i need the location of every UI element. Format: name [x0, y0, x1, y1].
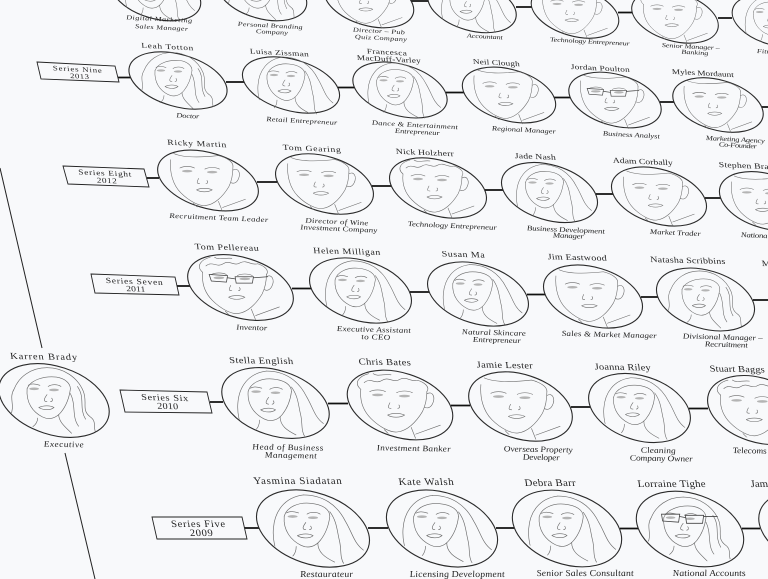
label: Series Five 2009: 2009 — [189, 528, 214, 539]
portrait: Kate Walsh: Kate Walsh — [398, 477, 455, 488]
portrait: Chris Bates: Chris Bates — [358, 357, 412, 368]
portrait: Jamie Lester: Jamie Lester — [476, 360, 534, 371]
portrait: Kate Walsh — [376, 476, 508, 579]
portrait: Natasha Scribbins — [649, 255, 764, 349]
label: Series Seven 2011: Series Seven — [105, 276, 164, 287]
connector line series nine — [118, 78, 768, 107]
portrait: Debra Barr: Debra Barr — [524, 478, 577, 489]
portrait: Jamie Lester: Developer — [521, 452, 561, 462]
portrait: Jamie Lester — [460, 360, 581, 462]
portrait: Francesca MacDuff-Varley: MacDuff-Varley — [357, 54, 422, 65]
portrait: Tom Gearing: Tom Gearing — [282, 143, 342, 154]
portrait: Tom Pellereau — [180, 242, 301, 332]
connector line series six — [210, 402, 708, 408]
portrait: Jade Nash: Jade Nash — [514, 151, 557, 162]
portrait: James McQueen — [749, 478, 768, 579]
portrait: Jordan Poulton — [562, 62, 668, 140]
portrait: Joanna Riley: Company Owner — [629, 453, 694, 463]
portrait: Yasmina Siadatan — [246, 476, 380, 579]
series six row — [0, 351, 768, 463]
portrait: Nick Holzherr: Technology Entrepreneur — [407, 220, 498, 232]
label: Series Nine 2013: 2013 — [70, 72, 89, 81]
label: Series Six 2010: 2010 — [157, 401, 179, 412]
label: Series Five 2009 — [152, 517, 247, 539]
portrait: Digital Marketing Sales Manager — [105, 0, 207, 33]
label: Series Eight 2012 — [63, 166, 149, 187]
portrait: Myles Mordaunt: Co-Founder — [718, 140, 757, 150]
portrait: Luisa Zissman: Retail Entrepreneur — [265, 115, 338, 127]
portrait: Jordan Poulton: Jordan Poulton — [571, 63, 631, 74]
portrait: Digital Marketing Sales Manager: Sales Manager — [135, 23, 189, 33]
portrait: Stuart Baggs — [699, 363, 768, 457]
portrait: Leah Totton: Doctor — [175, 111, 200, 120]
portrait: Myles Mordaunt: Myles Mordaunt — [672, 68, 735, 79]
portrait: Jim Eastwood: Jim Eastwood — [547, 252, 608, 263]
portrait: Jim Eastwood: Sales & Market Manager — [561, 329, 658, 340]
portrait: Helen Milligan — [302, 246, 419, 342]
portrait: Technology Entrepreneur: Technology Entrepreneur — [550, 36, 630, 47]
portrait: Karren Brady: Karren Brady — [10, 351, 78, 363]
label: Series Seven 2011: 2011 — [126, 284, 146, 294]
label: Series Nine 2013 — [37, 62, 119, 82]
portrait: Joanna Riley: Joanna Riley — [594, 362, 651, 373]
portrait: Tom Gearing: Director of Wine — [304, 216, 369, 227]
portrait: Senior Manager Banking — [626, 0, 724, 57]
portrait: Karren Brady — [0, 351, 119, 450]
series five row — [152, 476, 768, 579]
portrait: Senior Manager Banking: Banking — [681, 49, 709, 57]
portrait: Susan Ma: Susan Ma — [441, 249, 485, 259]
portrait: Ricky Martin: Recruitment Team Leader — [168, 212, 270, 224]
portrait: Joanna Riley — [580, 361, 699, 463]
portrait: Accountant: Accountant — [465, 32, 504, 41]
portrait: Stuart Baggs: Stuart Baggs — [709, 364, 766, 375]
series ten row — [105, 0, 768, 58]
portrait: Stella English — [213, 355, 338, 460]
portrait: Director Pub Quiz Company: Director – Pub — [351, 26, 406, 36]
portrait: Fitness Entrepreneur — [726, 0, 768, 58]
portrait: Stella English: Head of Business — [251, 442, 324, 452]
portrait: Myles Mordaunt: Marketing Agency — [704, 134, 766, 145]
portrait: Myles Mordaunt — [666, 68, 768, 150]
portrait: Neil Clough: Regional Manager — [490, 124, 556, 135]
portrait: Lorraine Tighe: National Accounts — [671, 569, 747, 579]
portrait: Jim Eastwood — [536, 252, 658, 340]
portrait: Ricky Martin: Ricky Martin — [167, 138, 227, 149]
portrait: Susan Ma: Natural Skincare — [460, 328, 526, 338]
portrait: Accountant — [422, 0, 522, 42]
portrait: Francesca MacDuff-Varley — [346, 47, 459, 137]
portrait: Jordan Poulton: Business Analyst — [603, 129, 661, 140]
portrait: Nick Holzherr: Nick Holzherr — [395, 147, 454, 158]
portrait: Helen Milligan: Helen Milligan — [313, 246, 381, 257]
portrait: Senior Manager Banking: Senior Manager – — [662, 42, 721, 52]
portrait: Neil Clough — [456, 57, 562, 135]
portrait: Personal Branding Company: Company — [256, 28, 289, 37]
portrait: Chris Bates: Investment Banker — [375, 443, 452, 454]
portrait: Stella English: Management — [263, 450, 318, 460]
portrait: Yasmina Siadatan: Yasmina Siadatan — [253, 476, 343, 487]
portrait: Joanna Riley: Cleaning — [640, 445, 677, 455]
portrait: Luisa Zissman: Luisa Zissman — [250, 47, 310, 58]
portrait: Natasha Scribbins: Natasha Scribbins — [650, 255, 726, 266]
portrait: Leah Totton — [122, 42, 234, 120]
label: Series Six 2010 — [120, 390, 212, 413]
portrait: Adam Corbally: Market Trader — [648, 228, 702, 238]
portrait: Susan Ma — [420, 249, 536, 345]
connector line series five — [244, 527, 760, 530]
portrait: Personal Branding Company — [211, 0, 313, 37]
portrait: Director Pub Quiz Company — [318, 0, 420, 43]
portrait: Jade Nash: Manager — [551, 231, 585, 240]
label: Series Eight 2012: Series Eight — [78, 167, 132, 178]
portrait: Susan Ma: Entrepreneur — [471, 336, 522, 345]
connector line series ten — [198, 0, 732, 18]
portrait: Francesca MacDuff-Varley: Francesca — [366, 47, 407, 57]
portrait: Digital Marketing Sales Manager: Digital Marketing — [125, 14, 193, 24]
label: Series Six 2010: Series Six — [141, 392, 189, 404]
portrait: Tom Gearing — [268, 143, 381, 234]
series nine row — [37, 42, 768, 150]
portrait: Stella English: Stella English — [229, 355, 294, 367]
label: Series Nine 2013: Series Nine — [52, 64, 103, 75]
portrait: Nick Holzherr — [382, 147, 498, 232]
portrait: Technology Entrepreneur — [525, 0, 630, 47]
label: Series Seven 2011 — [91, 274, 179, 295]
portrait: Lorraine Tighe — [626, 478, 754, 579]
portrait: Stephen Brady — [712, 160, 768, 243]
connector line series eight — [147, 178, 721, 198]
portrait: Debra Barr: Senior Sales Consultant — [536, 569, 635, 579]
portrait: Helen Milligan: to CEO — [361, 333, 391, 342]
portrait: Tom Pellereau: Tom Pellereau — [194, 242, 260, 253]
tree trunk line lower — [65, 453, 95, 579]
series seven row — [91, 242, 768, 349]
portrait: Leah Totton: Leah Totton — [141, 42, 195, 52]
portrait: Lorraine Tighe: Lorraine Tighe — [637, 479, 707, 490]
portrait: Tom Gearing: Investment Company — [299, 223, 378, 234]
portrait: Jade Nash: Business Development — [526, 224, 606, 236]
portrait: Neil Clough: Neil Clough — [472, 58, 521, 68]
portrait: Personal Branding Company: Personal Branding — [236, 21, 303, 31]
portrait: Tom Pellereau: Inventor — [235, 323, 268, 332]
portrait: Luisa Zissman — [236, 47, 346, 127]
portrait: Natasha Scribbins: Recruitment — [703, 340, 749, 349]
portrait: Francesca MacDuff-Varley: Dance & Entertainment — [370, 119, 459, 131]
portrait: Ricky Martin — [150, 138, 270, 224]
portrait: Adam Corbally: Adam Corbally — [612, 156, 674, 167]
series eight row — [63, 138, 768, 243]
portrait: Chris Bates — [338, 357, 462, 454]
portrait: Karren Brady: Executive — [42, 439, 84, 449]
portrait: Debra Barr — [502, 477, 635, 579]
portrait: Jamie Lester: Overseas Property — [503, 444, 573, 454]
portrait: Director Pub Quiz Company: Quiz Company — [355, 34, 408, 43]
label: Series Five 2009: Series Five — [170, 519, 226, 530]
portrait: Jade Nash — [494, 151, 606, 240]
portrait: Francesca MacDuff-Varley: Entrepreneur — [393, 127, 440, 137]
portrait: Adam Corbally — [604, 156, 714, 238]
portrait: Natasha Scribbins: Divisional Manager – — [681, 332, 764, 342]
label: Series Eight 2012: 2012 — [96, 175, 117, 185]
connector line series seven — [177, 286, 768, 300]
portrait: Helen Milligan: Executive Assistant — [335, 325, 412, 335]
tree trunk line upper — [0, 168, 42, 348]
